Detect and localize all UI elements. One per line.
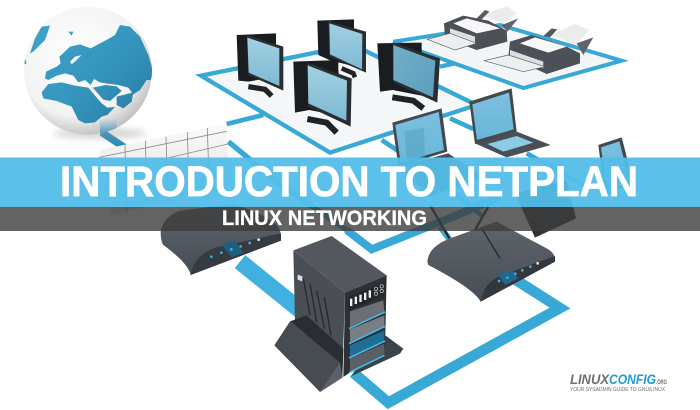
printer 2 [484,24,593,74]
laptop 3 [515,137,633,238]
logo: LinuxConfig.org: YOUR SYSADMIN GUIDE TO GNU/LINUX [570,387,666,393]
laptop 2 [469,88,551,157]
printer platform [393,25,622,88]
network links [102,63,587,403]
logo: LinuxConfig.org: CONFIG [609,371,656,387]
logo: LinuxConfig.org: LINUX [570,371,611,387]
globe shadow [53,128,147,139]
globe [24,7,153,138]
server [274,236,403,392]
monitor 2 [317,19,366,77]
logo: LinuxConfig.org [570,371,667,393]
subtitle banner: dark band [0,207,700,231]
subtitle: LINUX NETWORKING [222,207,427,230]
title banner: blue band [0,158,700,207]
router 2 [427,205,555,302]
printer 1 [427,6,518,50]
laptop 1 [392,108,483,197]
logo: LinuxConfig.org: .ORG [656,380,667,386]
router 1 [161,204,281,275]
printers [427,6,593,74]
monitor 4 [377,42,440,108]
monitor 1 [237,33,283,96]
monitor 3 [293,60,352,133]
monitors [237,19,440,133]
title: INTRODUCTION TO NETPLAN [60,158,638,206]
monitor platform [201,45,477,153]
firewall [99,124,230,215]
